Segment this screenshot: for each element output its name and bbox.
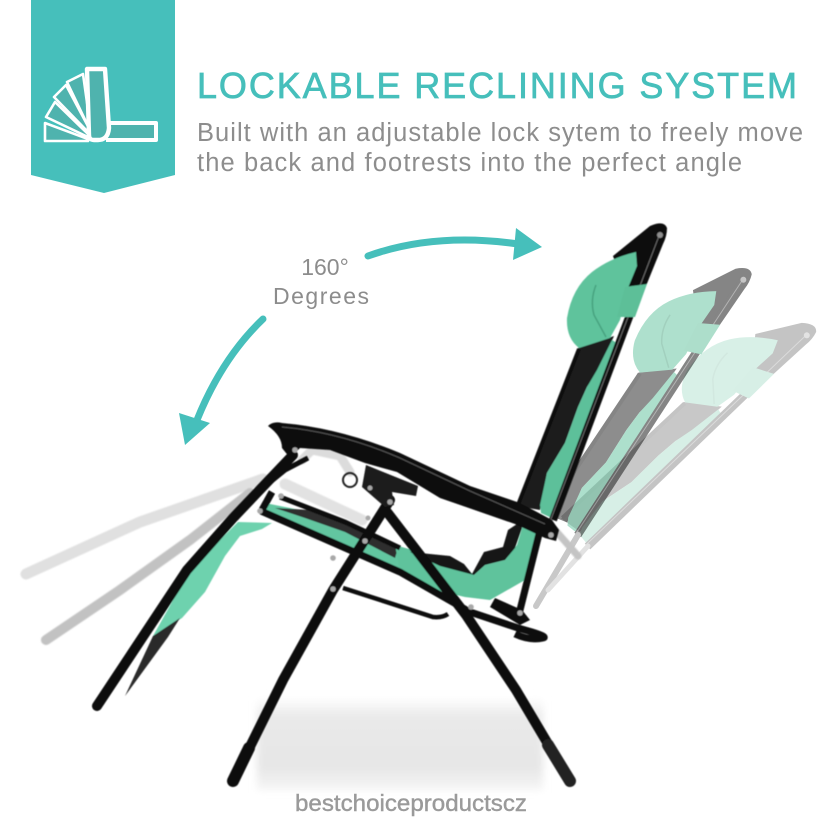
icon: reclining positions — [45, 69, 156, 141]
ghost rails below armrest — [536, 535, 588, 606]
ghost footrest upper — [26, 479, 263, 574]
ghost footrest lower — [46, 493, 250, 640]
headrest pillow — [567, 252, 637, 348]
ghost under armrest — [285, 484, 362, 520]
seat back fabric — [410, 522, 522, 575]
footrest leg — [97, 455, 293, 706]
description: Built with an adjustable lock sytem to freely move — [197, 119, 803, 147]
seat fabric front — [262, 503, 410, 575]
description: the back and footrests into the perfect angle — [197, 149, 742, 177]
ghost pivot ends — [555, 530, 578, 556]
watermark: bestchoiceproductscz — [295, 790, 527, 816]
footrest lower fabric — [125, 618, 180, 696]
frame top — [613, 223, 667, 290]
footrest cross bar — [262, 492, 272, 510]
floor shadow — [257, 698, 543, 790]
backrest — [517, 223, 667, 520]
angle label: Degrees — [273, 283, 369, 309]
rear strut — [343, 588, 448, 617]
angle label — [273, 254, 369, 309]
title: LOCKABLE RECLINING SYSTEM — [197, 65, 797, 106]
frame rails — [553, 232, 661, 520]
chair — [97, 223, 667, 781]
arrow: lower left — [179, 319, 263, 445]
back cushion black — [517, 336, 614, 510]
lock mechanism — [343, 465, 418, 507]
rear leg — [387, 512, 570, 781]
headrest strap — [617, 284, 647, 317]
seat cushion — [395, 525, 545, 600]
ghost backrest far — [555, 263, 818, 596]
footrest cushion — [153, 522, 272, 636]
arrow: upper right — [368, 228, 542, 260]
description — [197, 119, 803, 177]
footrest inner bar — [248, 458, 308, 500]
back cushion green — [540, 340, 620, 520]
ghost backrest middle — [543, 238, 753, 560]
front leg — [233, 500, 390, 781]
lock ring — [343, 473, 357, 487]
back support strut — [518, 530, 540, 618]
lower seat rail — [261, 511, 544, 639]
banner with recline icon — [31, 0, 175, 193]
lock housing — [362, 465, 418, 507]
frame rivets — [257, 447, 554, 616]
ghost footrest positions — [26, 450, 578, 640]
armrest — [268, 422, 559, 541]
ghost backrest positions — [536, 238, 818, 606]
banner ribbon — [31, 0, 175, 193]
angle label: 160° — [301, 254, 349, 280]
upper seat rail — [280, 497, 400, 548]
